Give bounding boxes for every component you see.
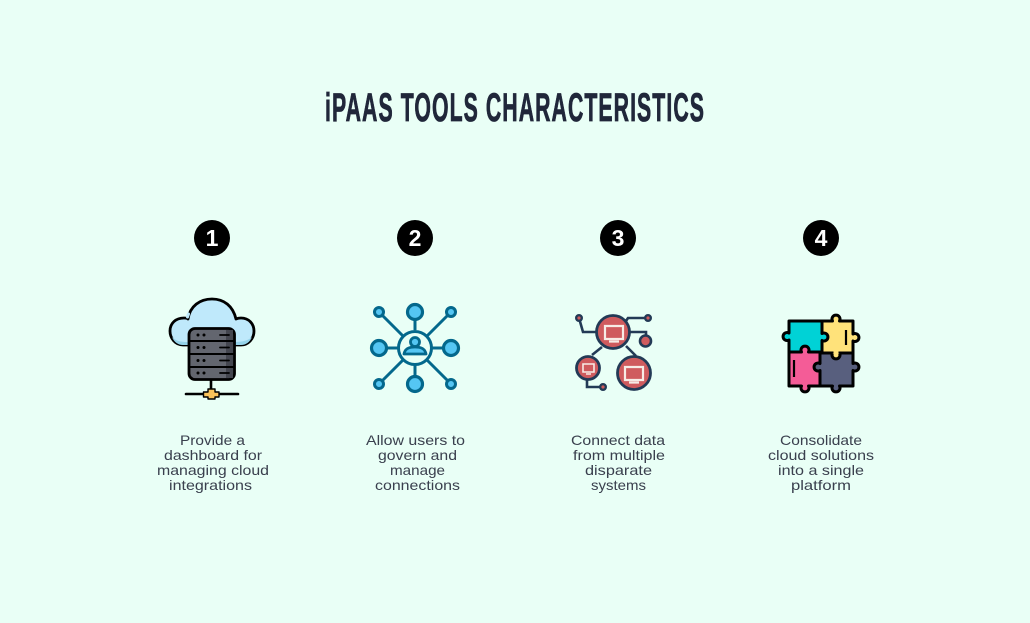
text: step 1 description: Provide a [180, 432, 245, 448]
text: step 4 description: cloud solutions [768, 447, 874, 463]
text: step 4 description: platform [791, 477, 851, 493]
text: step 2 description: govern and [378, 447, 457, 463]
icon: cloud server [170, 299, 254, 399]
text: step 1 description: managing cloud [157, 462, 269, 478]
text: step 3 description: systems [591, 477, 646, 493]
step 2 number badge: 2 [409, 225, 421, 251]
text: step 1 description: dashboard for [164, 447, 262, 463]
text: step 3 description: from multiple [573, 447, 665, 463]
text: step 3 description: Connect data [571, 432, 665, 448]
step 2 number badge [397, 220, 433, 256]
icon: puzzle pieces [783, 315, 859, 392]
title: iPAAS TOOLS CHARACTERISTICS [325, 86, 705, 130]
text: step 4 description: Consolidate [780, 432, 862, 448]
text: step 1 description [157, 432, 269, 493]
step 1 number badge: 1 [206, 225, 219, 251]
text: step 2 description [366, 432, 465, 493]
text: step 1 description: integrations [169, 477, 252, 493]
text: step 4 description [768, 432, 874, 493]
step 3 number badge [600, 220, 636, 256]
text: step 3 description [571, 432, 665, 493]
step 4 number badge: 4 [815, 225, 828, 251]
text: step 2 description: connections [375, 477, 460, 493]
step 4 number badge [803, 220, 839, 256]
step 1 number badge [194, 220, 230, 256]
step 3 number badge: 3 [612, 225, 624, 251]
text: step 4 description: into a single [778, 462, 864, 478]
text: step 3 description: disparate [585, 462, 652, 478]
text: step 2 description: manage [390, 462, 445, 478]
icon: connected monitors [576, 315, 651, 390]
text: step 2 description: Allow users to [366, 432, 465, 448]
icon: connection network [372, 304, 458, 392]
